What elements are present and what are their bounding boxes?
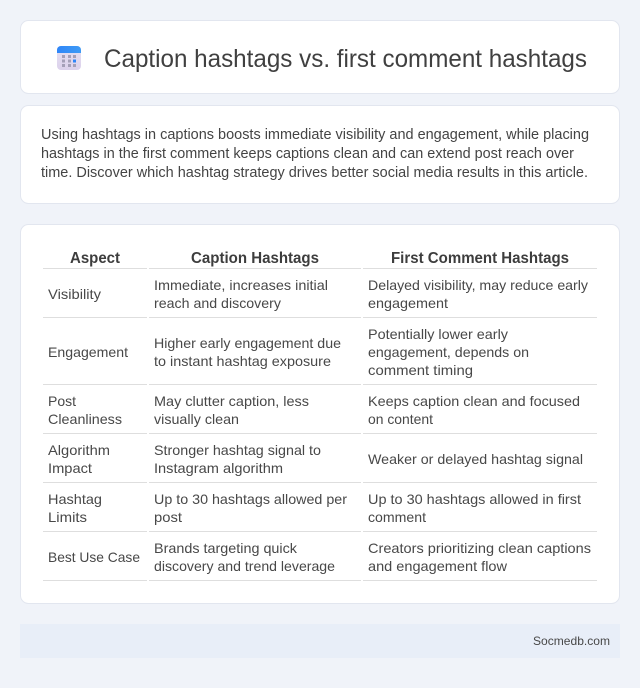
row: algorithm impact: Stronger hashtag signal to [154,442,321,458]
title text: Caption hashtags vs. first comment hashtags [104,45,587,73]
row: visibility: engagement [368,295,448,311]
row: engagement: to instant hashtag exposure [154,353,331,369]
row: visibility: Delayed visibility, may reduce early [368,277,588,293]
row: best use case: and engagement flow [368,558,508,574]
row: engagement: Higher early engagement due [154,335,341,351]
table header [70,250,569,267]
row: post cleanliness: visually clean [154,411,239,427]
row: post cleanliness: Keeps caption clean and focused [368,393,580,409]
footer [20,624,620,658]
row: best use case: Brands targeting quick [154,540,298,556]
intro text: hashtags in the first comment keeps captions clean and can extend post reach over [41,146,574,162]
row: hashtag limits: comment [368,509,426,525]
row: post cleanliness: May clutter caption, less [154,393,309,409]
row: best use case: Best Use Case [48,549,140,565]
row: algorithm impact [48,442,583,476]
row: engagement [48,326,529,378]
row: post cleanliness: on content [368,411,433,427]
row: algorithm impact: Instagram algorithm [154,460,283,476]
table header: Caption Hashtags [191,250,319,267]
row: engagement: engagement, depends on [368,344,529,360]
row: post cleanliness [48,393,580,427]
row: hashtag limits: Up to 30 hashtags allowed per [154,491,347,507]
row: post cleanliness: Cleanliness [48,411,122,427]
row: engagement: Potentially lower early [368,326,508,342]
footer credit: Socmedb.com [533,634,610,648]
table header: First Comment Hashtags [391,250,569,267]
panel: comparison table [20,224,620,604]
row: algorithm impact: Weaker or delayed hashtag signal [368,451,583,467]
intro text [41,127,589,181]
table header: Aspect [70,250,120,267]
row: algorithm impact: Algorithm [48,442,110,458]
row: algorithm impact: Impact [48,460,92,476]
row: hashtag limits: post [154,509,182,525]
row: hashtag limits: Limits [48,509,87,525]
row: post cleanliness: Post [48,393,76,409]
row: visibility: Visibility [48,286,101,302]
row: hashtag limits [48,491,581,525]
intro text: time. Discover which hashtag strategy drives better social media results in this article. [41,165,588,181]
row: visibility [48,277,588,311]
row: engagement: comment timing [368,362,473,378]
row: best use case: discovery and trend leverage [154,558,335,574]
panel: title [20,20,620,94]
row: hashtag limits: Up to 30 hashtags allowed in first [368,491,581,507]
icon: calendar [57,46,81,70]
table rules [43,268,597,581]
row: visibility: reach and discovery [154,295,281,311]
row: best use case: Creators prioritizing clean captions [368,540,591,556]
intro text: Using hashtags in captions boosts immediate visibility and engagement, while placing [41,127,589,143]
row: best use case [48,540,591,574]
panel: introduction [20,106,620,204]
row: engagement: Engagement [48,344,128,360]
row: visibility: Immediate, increases initial [154,277,328,293]
row: hashtag limits: Hashtag [48,491,102,507]
